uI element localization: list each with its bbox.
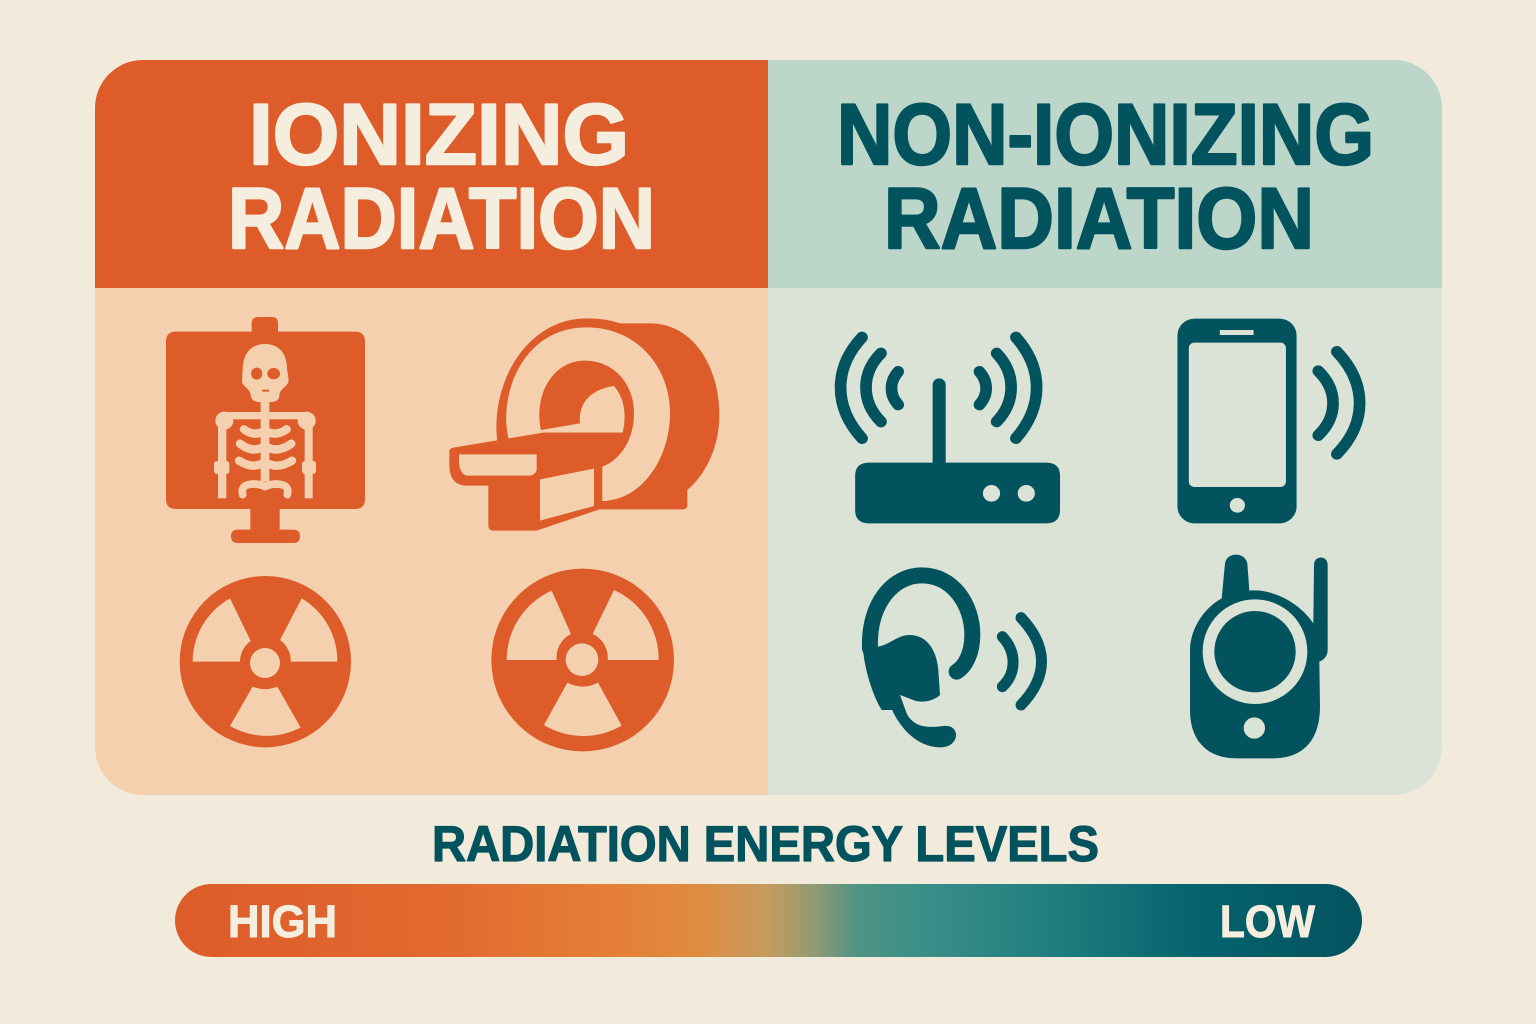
heading: radiation energy levels: RADIATION ENERGY LEVELS (432, 816, 1099, 872)
icon: CT scanner (449, 318, 719, 531)
icon: radiation symbol left (180, 576, 351, 747)
icon: smartphone (1177, 319, 1360, 523)
icon: x-ray skeleton (166, 317, 365, 543)
label: high: HIGH (228, 896, 337, 947)
energy gradient bar (175, 884, 1362, 957)
ionizing icons background (95, 288, 768, 795)
icon: wifi router (841, 337, 1060, 523)
ionizing header background (95, 60, 768, 288)
icon: baby monitor (1190, 555, 1328, 758)
non-ionizing icons background (768, 288, 1442, 795)
heading: non-ionizing radiation (837, 87, 1374, 267)
panel: ionizing radiation (95, 60, 768, 795)
heading: non-ionizing radiation: NON-IONIZING (837, 87, 1374, 183)
heading: ionizing radiation: RADIATION (228, 171, 655, 267)
heading: ionizing radiation (228, 87, 655, 267)
heading: non-ionizing radiation: RADIATION (884, 171, 1314, 267)
icon: radiation symbol right (491, 569, 674, 751)
heading: ionizing radiation: IONIZING (249, 87, 629, 183)
label: low: LOW (1220, 896, 1315, 947)
icon: headset (862, 575, 1041, 747)
panel: non-ionizing radiation (768, 60, 1442, 795)
non-ionizing header background (768, 60, 1442, 288)
